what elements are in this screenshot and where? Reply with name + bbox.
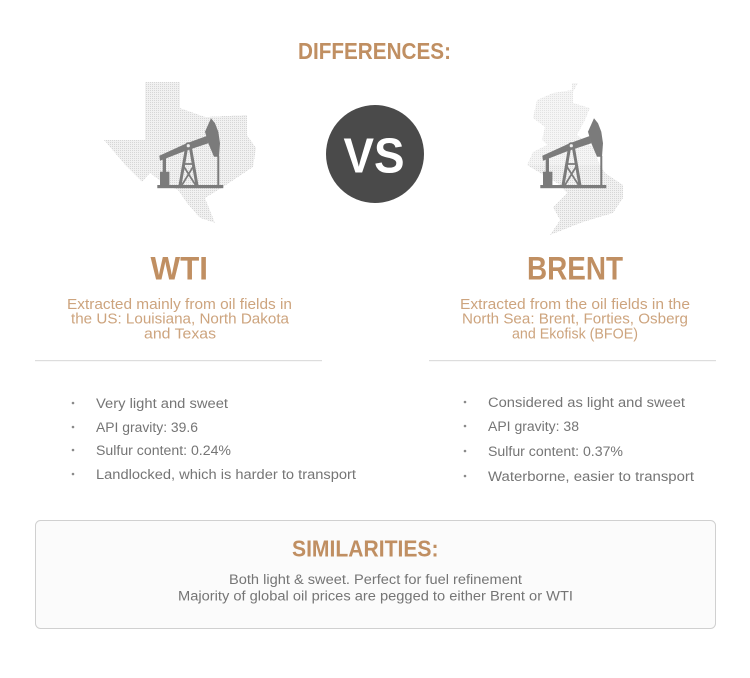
text: similarities description: Both light & sweet. Perfect for fuel refinement xyxy=(229,572,522,587)
panel: WTI xyxy=(35,250,356,482)
icon: VS badge: VS xyxy=(344,129,404,184)
heading: WTI: WTI xyxy=(150,250,208,286)
text: WTI origin: and Texas xyxy=(144,327,216,343)
text: WTI origin: Extracted mainly from oil fields in xyxy=(67,297,292,313)
list: Brent properties: Sulfur content: 0.37% xyxy=(488,444,623,459)
text: WTI origin: the US: Louisiana, North Dakota xyxy=(71,312,290,328)
list: WTI properties: Very light and sweet xyxy=(96,396,228,411)
list: WTI properties: Landlocked, which is harder to transport xyxy=(96,467,356,482)
map: Scotland and north dotted outline xyxy=(527,83,600,165)
icon: pump jack xyxy=(540,118,606,188)
icon: VS badge xyxy=(326,105,424,203)
text: similarities description: Majority of global oil prices are pegged to either Brent or WTI xyxy=(178,588,573,604)
list: Brent properties: Waterborne, easier to transport xyxy=(488,469,694,484)
list: WTI properties: API gravity: 39.6 xyxy=(96,420,198,435)
list: WTI properties xyxy=(72,396,356,482)
panel: Brent xyxy=(429,250,716,484)
text: similarities description xyxy=(178,572,573,604)
heading: similarities: SIMILARITIES: xyxy=(292,536,438,562)
map: Texas dotted outline xyxy=(104,82,256,223)
heading: Brent: BRENT xyxy=(527,250,623,286)
icon: Texas map with pump jack xyxy=(104,82,256,223)
text: Brent origin: Extracted from the oil fields in the xyxy=(460,297,690,313)
icon: pump jack xyxy=(157,118,223,188)
text: WTI origin xyxy=(67,297,292,343)
icon: UK map with pump jack xyxy=(527,83,623,235)
panel: similarities xyxy=(36,520,716,628)
list: Brent properties: Considered as light and sweet xyxy=(488,395,685,410)
text: Brent origin xyxy=(460,297,690,343)
list: WTI properties: Sulfur content: 0.24% xyxy=(96,443,231,458)
map: England dotted outline xyxy=(527,165,623,235)
title: differences: DIFFERENCES: xyxy=(298,38,451,64)
text: Brent origin: North Sea: Brent, Forties, Osberg xyxy=(462,312,688,328)
text: Brent origin: and Ekofisk (BFOE) xyxy=(512,327,638,343)
list: Brent properties xyxy=(464,395,694,484)
list: Brent properties: API gravity: 38 xyxy=(488,419,579,434)
